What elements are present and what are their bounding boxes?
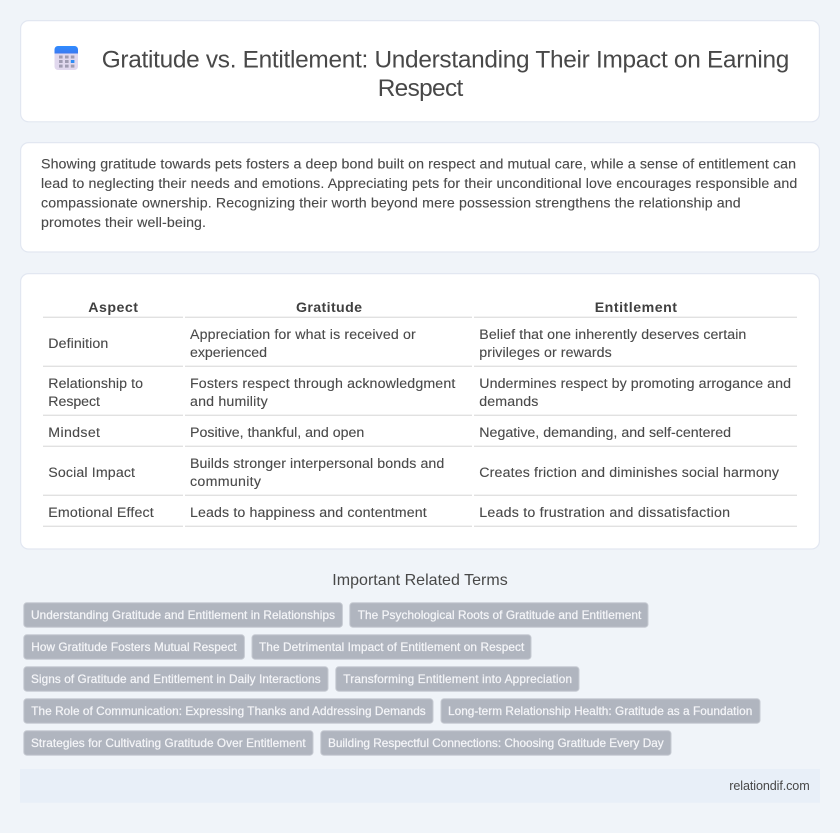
chip	[321, 731, 671, 755]
chip: Signs of Gratitude and Entitlement in Daily Interactions	[31, 672, 321, 686]
panel: related term chips	[24, 603, 760, 755]
chip: Strategies for Cultivating Gratitude Over Entitlement	[31, 736, 306, 750]
chip: Long-term Relationship Health: Gratitude as a Foundation	[448, 704, 752, 718]
row: social impact: Social Impact	[48, 465, 135, 481]
row: definition: experienced	[190, 345, 267, 361]
row: relationship to respect: and humility	[190, 394, 269, 410]
row: relationship to respect: Undermines respect by promoting arrogance and	[479, 376, 791, 392]
table header: Aspect	[88, 300, 138, 316]
row: relationship to respect	[48, 376, 791, 410]
table header: Entitlement	[595, 300, 677, 316]
title: Respect	[378, 75, 464, 102]
panel: comparison table	[21, 274, 819, 549]
title: Gratitude vs. Entitlement: Understanding Their Impact on Earning	[102, 46, 789, 73]
chip: How Gratitude Fosters Mutual Respect	[31, 640, 237, 654]
source link text: relationdif.com	[729, 779, 810, 793]
chip	[24, 635, 244, 659]
title	[102, 46, 789, 102]
table header: Gratitude	[296, 300, 362, 316]
intro text: Showing gratitude towards pets fosters a deep bond built on respect and mutual care, while a sense of entitlement can	[41, 156, 796, 172]
row: relationship to respect: demands	[479, 394, 538, 410]
row: definition: privileges or rewards	[479, 345, 612, 361]
row: definition: Belief that one inherently deserves certain	[479, 327, 746, 343]
chip: Building Respectful Connections: Choosing Gratitude Every Day	[328, 736, 664, 750]
row: emotional effect	[48, 505, 730, 521]
row: emotional effect: Emotional Effect	[48, 505, 154, 521]
row: social impact: Builds stronger interpersonal bonds and	[190, 456, 444, 472]
chip	[24, 667, 328, 691]
intro text: compassionate ownership. Recognizing their worth beyond mere possession strengthens the relationship and	[41, 195, 741, 211]
panel: introduction	[21, 143, 819, 252]
row: mindset: Negative, demanding, and self-centered	[479, 425, 731, 441]
chip	[24, 731, 313, 755]
row: relationship to respect: Fosters respect through acknowledgment	[190, 376, 455, 392]
row: social impact: Creates friction and diminishes social harmony	[479, 465, 780, 481]
chip: The Psychological Roots of Gratitude and Entitlement	[358, 608, 642, 622]
row: mindset	[48, 425, 731, 441]
row: social impact	[48, 456, 780, 490]
row: relationship to respect: Relationship to	[48, 376, 143, 392]
chip: Understanding Gratitude and Entitlement in Relationships	[31, 608, 335, 622]
chip: The Detrimental Impact of Entitlement on Respect	[259, 640, 525, 654]
row: mindset: Positive, thankful, and open	[190, 425, 364, 441]
intro text	[41, 156, 797, 231]
chip	[24, 699, 433, 723]
chip	[252, 635, 531, 659]
row: definition	[48, 327, 746, 361]
chip: The Role of Communication: Expressing Thanks and Addressing Demands	[31, 704, 426, 718]
chip: Transforming Entitlement into Appreciation	[343, 672, 572, 686]
footer	[20, 769, 820, 803]
chip	[441, 699, 760, 723]
row: emotional effect: Leads to frustration and dissatisfaction	[479, 505, 730, 521]
chip	[24, 603, 342, 627]
panel: title header	[21, 21, 819, 122]
heading: important related terms: Important Related Terms	[332, 572, 508, 589]
row: social impact: community	[190, 474, 262, 490]
row: mindset: Mindset	[48, 425, 100, 441]
row: definition: Appreciation for what is received or	[190, 327, 416, 343]
icon: calendar	[54, 46, 78, 70]
intro text: lead to neglecting their needs and emotions. Appreciating pets for their unconditional love encourages responsible and	[41, 176, 797, 192]
intro text: promotes their well-being.	[41, 215, 206, 231]
table header	[88, 300, 677, 316]
row: relationship to respect: Respect	[48, 394, 100, 410]
row: emotional effect: Leads to happiness and contentment	[190, 505, 427, 521]
row: definition: Definition	[48, 336, 108, 352]
chip	[336, 667, 579, 691]
chip	[350, 603, 648, 627]
